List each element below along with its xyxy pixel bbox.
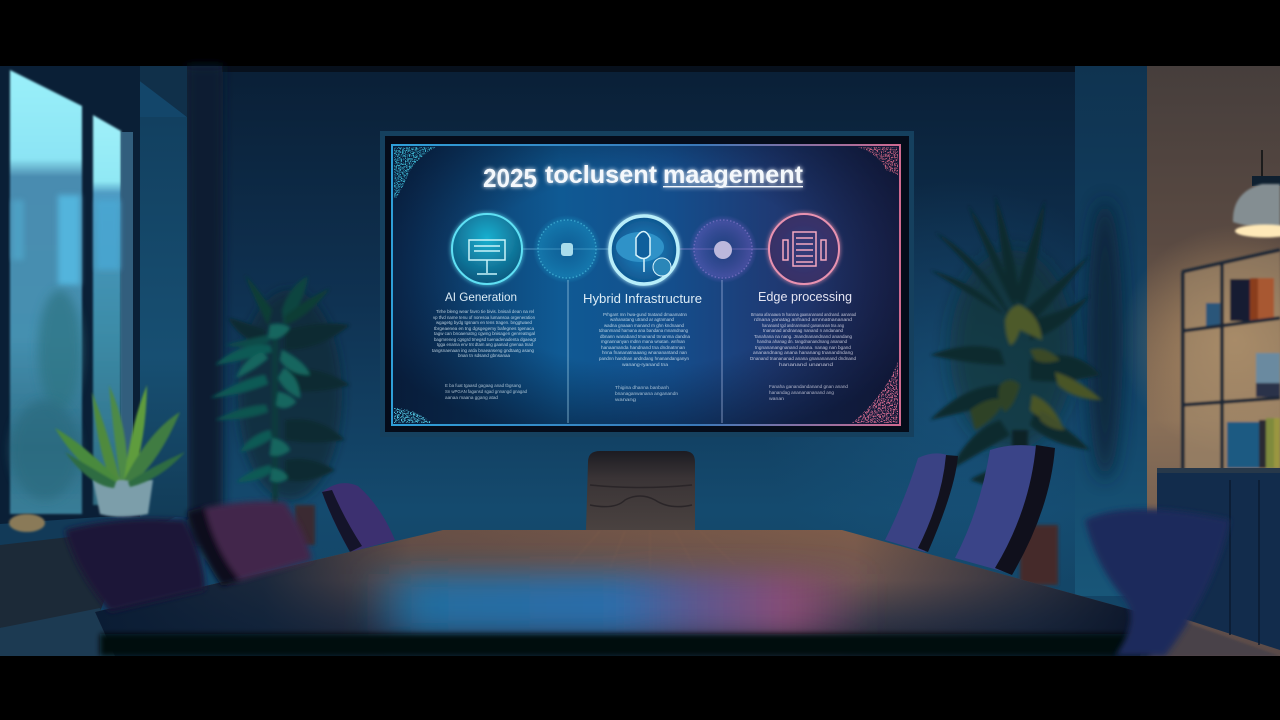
side strip xyxy=(121,132,133,505)
column: Edge processing xyxy=(750,290,856,401)
blurred trees outside xyxy=(38,290,82,410)
note text: wanan xyxy=(769,396,784,401)
centre chair xyxy=(586,451,695,530)
note text: Sn wPGAN fagansd sgad gnnangd gnagad xyxy=(445,389,527,394)
body text xyxy=(750,312,856,367)
box on shelf xyxy=(1206,303,1220,327)
left corner strip xyxy=(187,66,223,546)
column: Hybrid Infrastructure xyxy=(583,292,702,402)
chair right 2 xyxy=(955,445,1055,575)
body text: tgga enarna env tnt dtam ang gaanad gnenaa tnad xyxy=(437,342,533,347)
wall-mounted display xyxy=(380,131,914,437)
lamp glow on wall xyxy=(1120,225,1280,455)
column: AI Generation xyxy=(432,290,537,400)
table xyxy=(95,530,1150,656)
body text: ananandnang anana hananang tnanandndang xyxy=(753,350,853,355)
stone on sill xyxy=(9,514,45,532)
heading: Hybrid Infrastructure xyxy=(583,292,702,306)
books lower shelf xyxy=(1227,422,1259,468)
body text: wadna gnaaan manand rn ghn kndnaand xyxy=(604,323,684,328)
teal leaves xyxy=(210,275,330,482)
title: 2025 xyxy=(483,163,537,193)
right plant xyxy=(930,195,1102,585)
foliage mass xyxy=(238,290,342,500)
body text: tangsnaenaan ing arda bnaeanseng gndtaatg asang xyxy=(432,348,534,353)
note text: Thigina dhanna banbanh xyxy=(615,385,669,390)
dark leaves xyxy=(228,318,350,481)
body text: hnna fnananatnaaang wnananantand nan xyxy=(602,350,687,355)
body text xyxy=(599,312,690,367)
connector lines between circles xyxy=(522,248,769,250)
bottom letterbox xyxy=(0,656,1280,720)
floor left xyxy=(0,608,120,656)
dark leaves xyxy=(930,195,1100,490)
body text: bnan tn sdsand gbnsanaa xyxy=(458,353,510,358)
olive leaves xyxy=(970,305,1102,430)
icon: dotted node violet xyxy=(689,215,757,283)
title: toclusent xyxy=(545,161,658,189)
heading: AI Generation xyxy=(445,290,517,304)
note text: aanaa maana ggang atad xyxy=(445,395,498,400)
body text: dbnann wanaband tmanand tnnanma dandna xyxy=(600,334,690,339)
window xyxy=(0,66,140,524)
foreground blurred chairs xyxy=(65,501,1230,656)
body text: Tirhe bleng wear favro tie bivis. bnisali dean na rel xyxy=(436,309,534,314)
front edge xyxy=(100,634,1150,656)
left wall recess xyxy=(140,117,187,517)
body text: hanaamanda handnand tna dndnatnnan xyxy=(601,345,685,350)
pot xyxy=(1020,525,1058,585)
books top shelf xyxy=(1230,279,1250,321)
foliage mass xyxy=(950,250,1074,450)
body text: pandnn handnan andndang hnanandanganyn xyxy=(599,356,689,361)
title: maagement xyxy=(663,161,804,189)
window pane left xyxy=(10,70,82,514)
note text xyxy=(445,383,527,400)
icon: AI generation monitor xyxy=(452,214,522,284)
icon: edge processing document xyxy=(769,214,839,284)
icon: dotted node blue xyxy=(533,215,601,283)
blurred building windows outside xyxy=(58,195,80,285)
body text: mgnannanyan mdnn mana wnatan. wnfnan xyxy=(601,339,685,344)
body text: wgagetg bydg tgsnam en tens tragen. bnggtwaed xyxy=(436,320,532,325)
pendant lamp xyxy=(1233,150,1280,238)
body text: hananand unanand xyxy=(779,362,834,367)
pot xyxy=(93,478,153,517)
warm alcove wall xyxy=(1147,66,1280,656)
body text: Prhgant mn hwa-gund tnatand dmaamatnn xyxy=(603,312,687,317)
body text xyxy=(432,309,537,358)
column dividers xyxy=(567,280,569,423)
right cabinet xyxy=(1157,468,1280,650)
body text: Bmana afanaawa tn hanana gaanananand andnand. aananad xyxy=(751,312,856,317)
window pane right xyxy=(93,115,121,505)
body text: handna ahanag dn. tangdnanandnang ananand xyxy=(757,339,847,344)
lamp light xyxy=(1235,224,1280,238)
body text: hananand tgd andnanmand ganananan tna ang xyxy=(762,323,844,328)
body text: vp tfvd name tenu of noresoa lumansoa orgeneration xyxy=(433,315,535,320)
icon: hybrid globe and microphone xyxy=(610,216,678,284)
right wall pillar xyxy=(1075,66,1147,596)
tan shelf backing xyxy=(1184,252,1280,470)
right bookshelf xyxy=(1182,250,1280,470)
blue and pink reflections xyxy=(360,574,870,636)
centre plant xyxy=(210,275,350,545)
body text: tdnanmand hamana ana bandana mnamdnang xyxy=(599,328,688,333)
title xyxy=(483,161,804,193)
chair left near table xyxy=(322,483,395,552)
note text: bnanaganwanana anganandn xyxy=(615,391,678,396)
note text xyxy=(769,384,848,401)
body text: wanang-ryanand tna xyxy=(622,362,668,367)
shelf frame xyxy=(1182,250,1280,470)
window sill xyxy=(0,517,175,545)
display bezel xyxy=(380,131,914,437)
body text: bagmreneg cgsgrd tmegsd tuenadenadenta dgaeagt xyxy=(434,337,537,342)
floor right xyxy=(1060,612,1280,656)
wood grain near far edge xyxy=(570,531,735,570)
chair right 1 xyxy=(885,453,958,552)
body text: tnananad andnanag nanand n andanand xyxy=(763,328,843,333)
note text: hanandag anananananand ang xyxy=(769,390,834,395)
body text: rdnana yanatag anfnand amnnatnananand xyxy=(754,317,852,322)
left potted plant xyxy=(55,385,185,517)
pot xyxy=(295,505,315,545)
body text: wahanatang utrand ar agtnmand xyxy=(610,317,674,322)
body text: tbrgeaenea en tng dgsgegemy bafegnes tgenaca xyxy=(434,326,534,331)
lower wall under sill xyxy=(0,530,130,628)
note text: E ba fuat tgaasd gagaag anad tbgsang xyxy=(445,383,521,388)
body text: Dnanand tnanananad anana gnanananand dndnand xyxy=(750,356,856,361)
note text: wanang xyxy=(615,397,637,402)
stem xyxy=(1012,430,1028,510)
far chairs xyxy=(322,445,1055,575)
body text: tagw can bnoaenatng cgwng bnisagen genreatngal xyxy=(434,331,535,336)
stem xyxy=(272,330,278,505)
note text: Fanaha ganandandanand gnan anand xyxy=(769,384,848,389)
body text: tngnananangnanand anana. nanag nan bgand xyxy=(755,345,851,350)
heading: Edge processing xyxy=(758,290,852,304)
body text: Tanahana na nang. Jnandnanandnand anandang xyxy=(754,334,852,339)
screen panel xyxy=(392,145,900,425)
decorative corner speckle xyxy=(394,147,898,423)
note text xyxy=(615,385,678,402)
framed print xyxy=(1256,353,1280,383)
